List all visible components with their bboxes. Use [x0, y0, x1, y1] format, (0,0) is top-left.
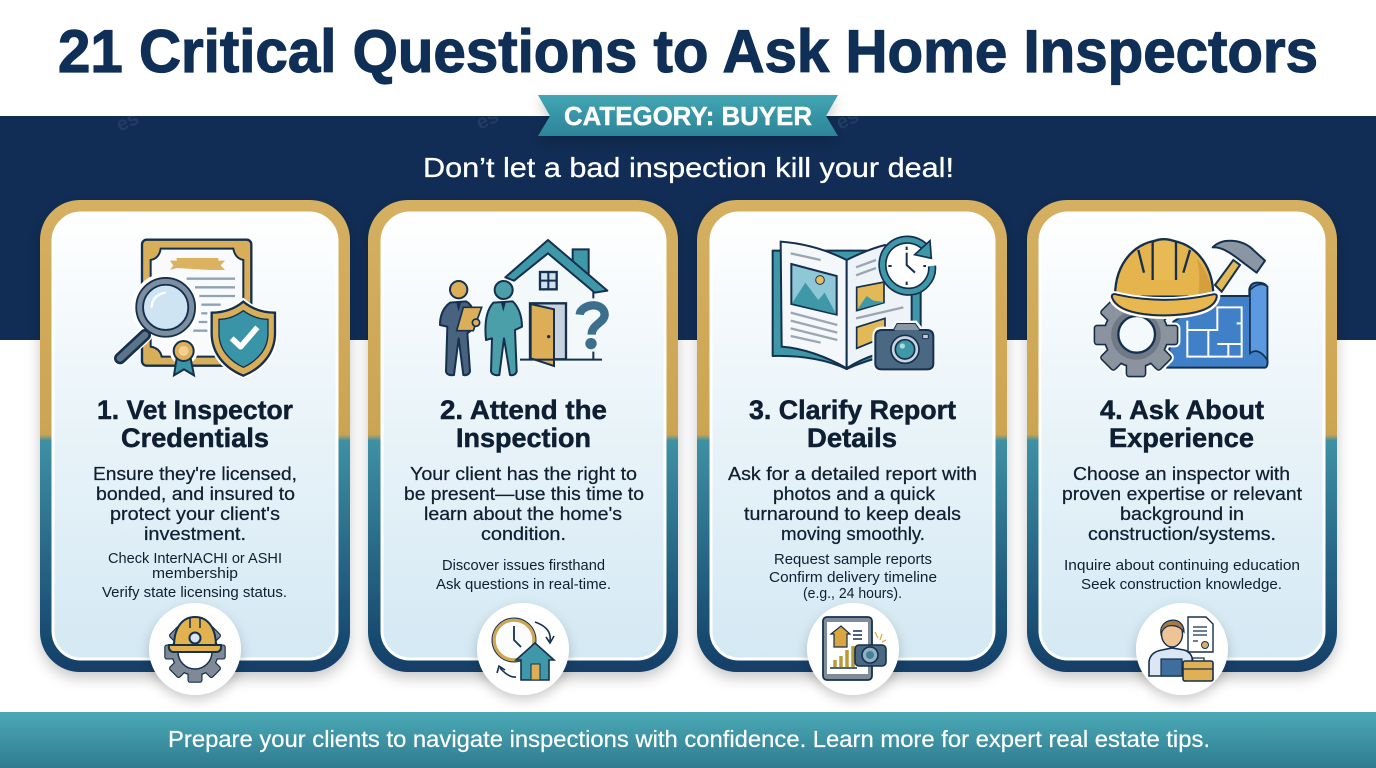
heading — [97, 395, 293, 453]
body text: construction/systems. — [1088, 524, 1276, 544]
tips — [436, 558, 611, 593]
body text: photos and a quick — [773, 484, 936, 504]
tips: Check InterNACHI or ASHI — [108, 551, 282, 567]
body text: protect your client's — [110, 504, 280, 524]
footer banner — [0, 712, 1376, 768]
watermarks: es — [833, 105, 862, 135]
body text — [93, 464, 297, 544]
panel: card 4 ask about experience — [1027, 200, 1337, 695]
body text — [728, 464, 977, 544]
heading: 4. Ask About — [1100, 395, 1264, 425]
heading: Credentials — [121, 423, 269, 453]
badge: clock and house — [477, 603, 569, 695]
navy header band — [0, 116, 1376, 340]
icon: certificate, magnifier and shield — [120, 240, 278, 379]
body text: Ask for a detailed report with — [728, 464, 977, 484]
tips — [769, 552, 937, 602]
tips: Request sample reports — [774, 552, 932, 568]
body text — [1062, 464, 1302, 544]
body text: investment. — [144, 524, 246, 544]
heading: 2. Attend the — [440, 395, 607, 425]
body text: learn about the home's — [424, 504, 622, 524]
icon: report book, clock and camera — [773, 237, 937, 372]
heading: Experience — [1109, 423, 1254, 453]
tips — [1064, 558, 1300, 593]
body text: Choose an inspector with — [1073, 464, 1290, 484]
tips — [102, 551, 287, 601]
body text: moving smoothly. — [781, 524, 925, 544]
tips: Discover issues firsthand — [442, 558, 605, 574]
panel: card 3 clarify report details — [697, 200, 1007, 695]
body text: turnaround to keep deals — [744, 504, 961, 524]
icon: inspectors at a house — [440, 240, 607, 375]
heading — [440, 395, 607, 453]
badge: tablet report and camera — [807, 603, 899, 695]
body text: Ensure they're licensed, — [93, 464, 297, 484]
watermarks: es — [473, 105, 502, 135]
heading: Details — [807, 423, 897, 453]
body text: be present—use this time to — [404, 484, 644, 504]
body text: proven expertise or relevant — [1062, 484, 1302, 504]
body text: condition. — [481, 524, 566, 544]
tips: (e.g., 24 hours). — [803, 586, 902, 602]
category ribbon: CATEGORY: BUYER — [564, 101, 812, 131]
title: 21 Critical Questions to Ask Home Inspectors — [58, 18, 1318, 85]
heading: 1. Vet Inspector — [97, 395, 293, 425]
heading: 3. Clarify Report — [749, 395, 956, 425]
tips: Inquire about continuing education — [1064, 558, 1300, 574]
heading: Inspection — [456, 423, 591, 453]
body text: Your client has the right to — [410, 464, 637, 484]
body text: bonded, and insured to — [96, 484, 295, 504]
watermarks — [113, 105, 862, 137]
badge: inspector with certificate and toolbox — [1136, 603, 1228, 695]
heading — [1100, 395, 1264, 453]
body text — [404, 464, 644, 544]
tips: Ask questions in real-time. — [436, 577, 611, 593]
heading — [749, 395, 956, 453]
watermarks: es — [113, 107, 142, 137]
icon: hard hat, hammer, gear and blueprint — [1095, 239, 1268, 376]
tips: Verify state licensing status. — [102, 585, 287, 601]
subtitle: Don’t let a bad inspection kill your deal! — [423, 152, 954, 183]
tips: Seek construction knowledge. — [1081, 577, 1282, 593]
category ribbon — [538, 95, 838, 136]
tips: Confirm delivery timeline — [769, 570, 937, 586]
body text: background in — [1120, 504, 1244, 524]
tips: membership — [152, 566, 238, 582]
badge: helmet and gear — [149, 603, 241, 695]
footer banner: Prepare your clients to navigate inspections with confidence. Learn more for expert real estate tips. — [168, 726, 1210, 752]
panel: card 1 vet inspector credentials — [40, 200, 350, 695]
panel: card 2 attend the inspection — [368, 200, 678, 695]
